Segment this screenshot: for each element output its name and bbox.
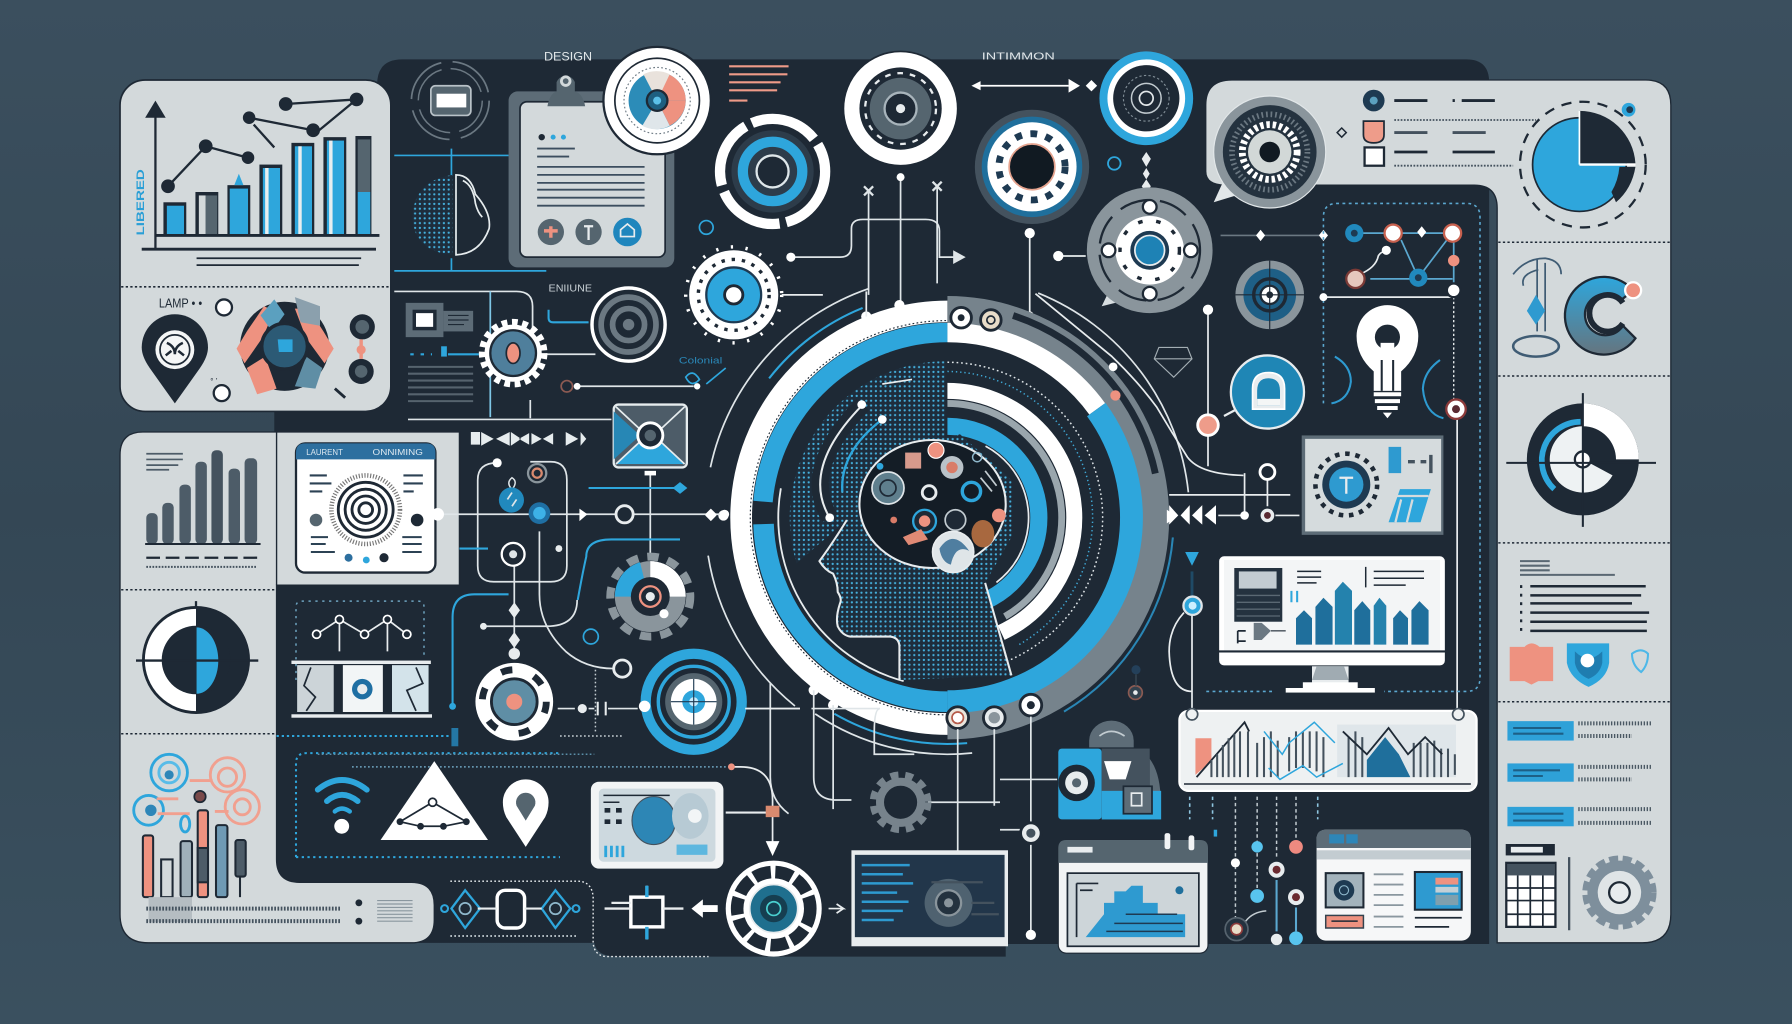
card: fingerprint report: ONNIMING: [373, 448, 423, 457]
node cluster: [431, 458, 729, 566]
card: web page: [1317, 830, 1471, 941]
head silhouette: [819, 434, 1011, 680]
icon: salmon core gear: [475, 663, 606, 741]
connectors: left network: [394, 291, 725, 709]
bar chart: gray columns: [145, 450, 261, 567]
wifi icon: [318, 780, 367, 834]
circle: blue target: [639, 654, 800, 750]
circle: wheel bottom: [726, 861, 843, 957]
icon: letter C ring: [1565, 277, 1641, 355]
connectors: upper right: [1035, 235, 1457, 714]
blue brackets: [1331, 357, 1443, 418]
central hub: head in concentric rings: [607, 177, 1288, 858]
card: fingerprint report: LAURENT: [306, 448, 343, 457]
icon: clipboard: [509, 75, 674, 267]
label: lamp: LAMP • •: [159, 296, 202, 310]
panel: top-left chart card: [120, 80, 391, 411]
y axis label: LIBERED: [135, 169, 147, 235]
card: lens diagram: [591, 782, 723, 869]
connectors: blue curves: [277, 310, 686, 857]
blue rules: [394, 149, 546, 271]
line chart dots: [162, 94, 362, 192]
circle: colored wheel: [603, 47, 711, 154]
legend: [1337, 90, 1536, 166]
circle: dotted ring: [975, 110, 1089, 224]
dotted field: [790, 361, 945, 563]
monitor peak bars: [1296, 582, 1429, 645]
icon: camera bag: [1058, 721, 1161, 819]
circle: blue badge: [1231, 355, 1304, 429]
dotted links: [318, 670, 729, 767]
speech circle: gray dial: [1053, 187, 1213, 313]
icon: swirl flows: [134, 754, 259, 832]
brain with icons: [859, 440, 1006, 573]
monitor dashboard: [1218, 555, 1446, 693]
pie chart: [1520, 102, 1646, 227]
chart axes: [142, 101, 379, 265]
card: gear report: [1302, 435, 1443, 535]
main rings: [680, 250, 1215, 786]
card: calendar chart: [1058, 833, 1208, 953]
icon: small bulb blue: [699, 221, 713, 234]
icon: half target: [136, 601, 258, 713]
icon: calculator grid: [1506, 845, 1569, 930]
icon: split brain: [413, 175, 489, 255]
icon: salmon book: [1510, 643, 1553, 685]
connectors: bottom of hub: [745, 683, 1057, 940]
panel: right column card: [1206, 80, 1671, 943]
icon: small tooth: [1632, 650, 1648, 672]
icon: tiny label stack: [561, 355, 726, 392]
card: waveform chart: [1179, 709, 1477, 791]
icon: white gear salmon eye: [482, 322, 544, 384]
label: engine: ENIIUNE: [549, 283, 592, 294]
panel: left column card: [120, 432, 459, 943]
circle: blue spiral: [1099, 51, 1193, 145]
icon: sketch funnel: [1513, 258, 1561, 357]
small circles: ° ’: [210, 377, 218, 386]
blue node link: [1129, 552, 1202, 714]
card: fingerprint report: [296, 443, 435, 573]
circle: spiky blue: [686, 247, 823, 343]
circle: concentric gray: [592, 288, 665, 361]
arrow row triangles: [471, 432, 586, 446]
striped legend: [729, 66, 789, 101]
icon: blue shield: [1567, 643, 1609, 687]
circle: small lens: [1235, 261, 1304, 329]
dashed drop lines: [1190, 797, 1318, 945]
circuit strip box: [441, 881, 709, 957]
icon: light bulb: [1357, 305, 1418, 418]
icon: location pin: [142, 314, 208, 403]
white location pin: [503, 779, 549, 847]
blue tab: [451, 728, 458, 746]
network graph: [1319, 224, 1461, 400]
card: terminal screen: [851, 850, 1008, 946]
icon: small drop: [1108, 157, 1121, 170]
label: intuition arrow: INTIMMON: [982, 51, 1055, 62]
icon: segmented gear: [237, 297, 334, 394]
inner right arcs: [821, 362, 1103, 662]
icon: gear with swirl: [610, 557, 690, 637]
blue legend rows: [1507, 721, 1651, 826]
legend fine print: [146, 897, 413, 925]
small circles: [210, 299, 375, 401]
icon: doc speech: [406, 303, 473, 337]
ring nodes: [705, 291, 1177, 729]
text block lines: [1520, 561, 1649, 632]
icon: gray gear: [1585, 858, 1654, 927]
circle: top-left monitor ring: [411, 62, 489, 139]
panel: central dark board: [274, 59, 1489, 957]
icon: tiny label stack: Colonial: [679, 355, 722, 365]
label: design: DESIGN: [544, 50, 592, 64]
icon: chip with arrow: [605, 886, 718, 939]
gem outline: [1154, 347, 1192, 377]
speech circle: gear: [1214, 96, 1326, 208]
dashed frame: [1205, 203, 1480, 691]
graph panel: peaks: [291, 601, 432, 718]
top connectors: [786, 173, 966, 305]
salmon ring node: [1446, 399, 1466, 419]
circle: blue lens: [720, 119, 825, 224]
icon: small gray gear: [873, 775, 928, 830]
thought arcs: [820, 379, 912, 522]
outer thin arcs: [607, 177, 1288, 858]
circle: gear top center: [843, 51, 958, 166]
text stripes: [408, 367, 473, 401]
arrow connector down: [726, 763, 779, 856]
icon: crosshair target: [1506, 393, 1656, 527]
bar chart: growth: [163, 136, 371, 235]
vertical diamond nodes: [480, 602, 631, 677]
triangle network: [381, 761, 488, 840]
label: intuition arrow: [971, 51, 1097, 93]
nodes upper right: [1169, 230, 1328, 525]
chart: thin bars: [143, 810, 246, 897]
icon: envelope: [614, 405, 687, 467]
diamonds vertical: [1142, 152, 1151, 193]
vertical connector: [1025, 228, 1035, 319]
icon: small teal circle: [583, 629, 598, 644]
